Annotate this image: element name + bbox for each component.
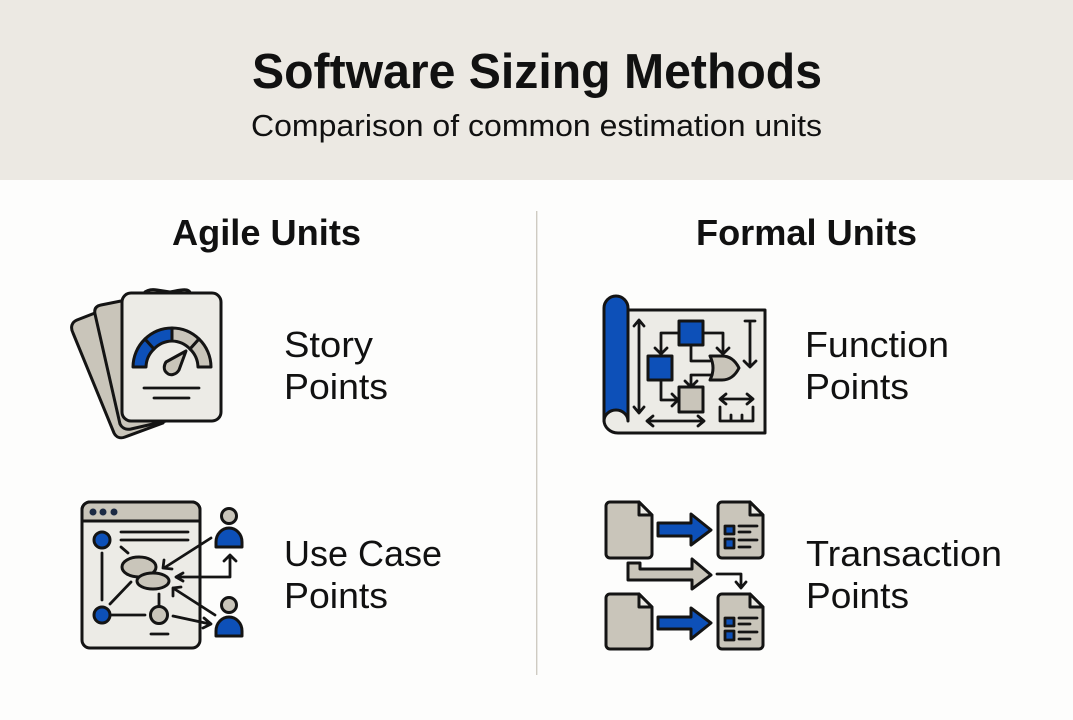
label: use case points — [284, 533, 442, 616]
subtitle: Comparison of common estimation units — [251, 108, 822, 143]
label: story points: Story — [284, 324, 373, 365]
label: story points — [284, 324, 388, 407]
icon: transaction documents and arrows — [606, 502, 763, 649]
label: transaction points: Transaction — [806, 533, 1002, 574]
label: story points: Points — [284, 366, 388, 407]
heading: formal units: Formal Units — [696, 212, 917, 253]
panel: formal units — [604, 212, 1002, 649]
label: use case points: Use Case — [284, 533, 442, 574]
label: function points: Function — [805, 324, 949, 365]
title: Software Sizing Methods — [252, 45, 822, 99]
label: function points: Points — [805, 366, 909, 407]
panel: agile units — [72, 212, 442, 648]
icon: story point cards with gauge — [72, 290, 221, 438]
header band — [0, 0, 1073, 180]
heading: agile units: Agile Units — [172, 212, 361, 253]
label: use case points: Points — [284, 575, 388, 616]
icon: use case diagram — [82, 502, 242, 648]
icon: function point blueprint — [604, 296, 765, 433]
label: transaction points: Points — [806, 575, 909, 616]
label: function points — [805, 324, 949, 407]
label: transaction points — [806, 533, 1002, 616]
